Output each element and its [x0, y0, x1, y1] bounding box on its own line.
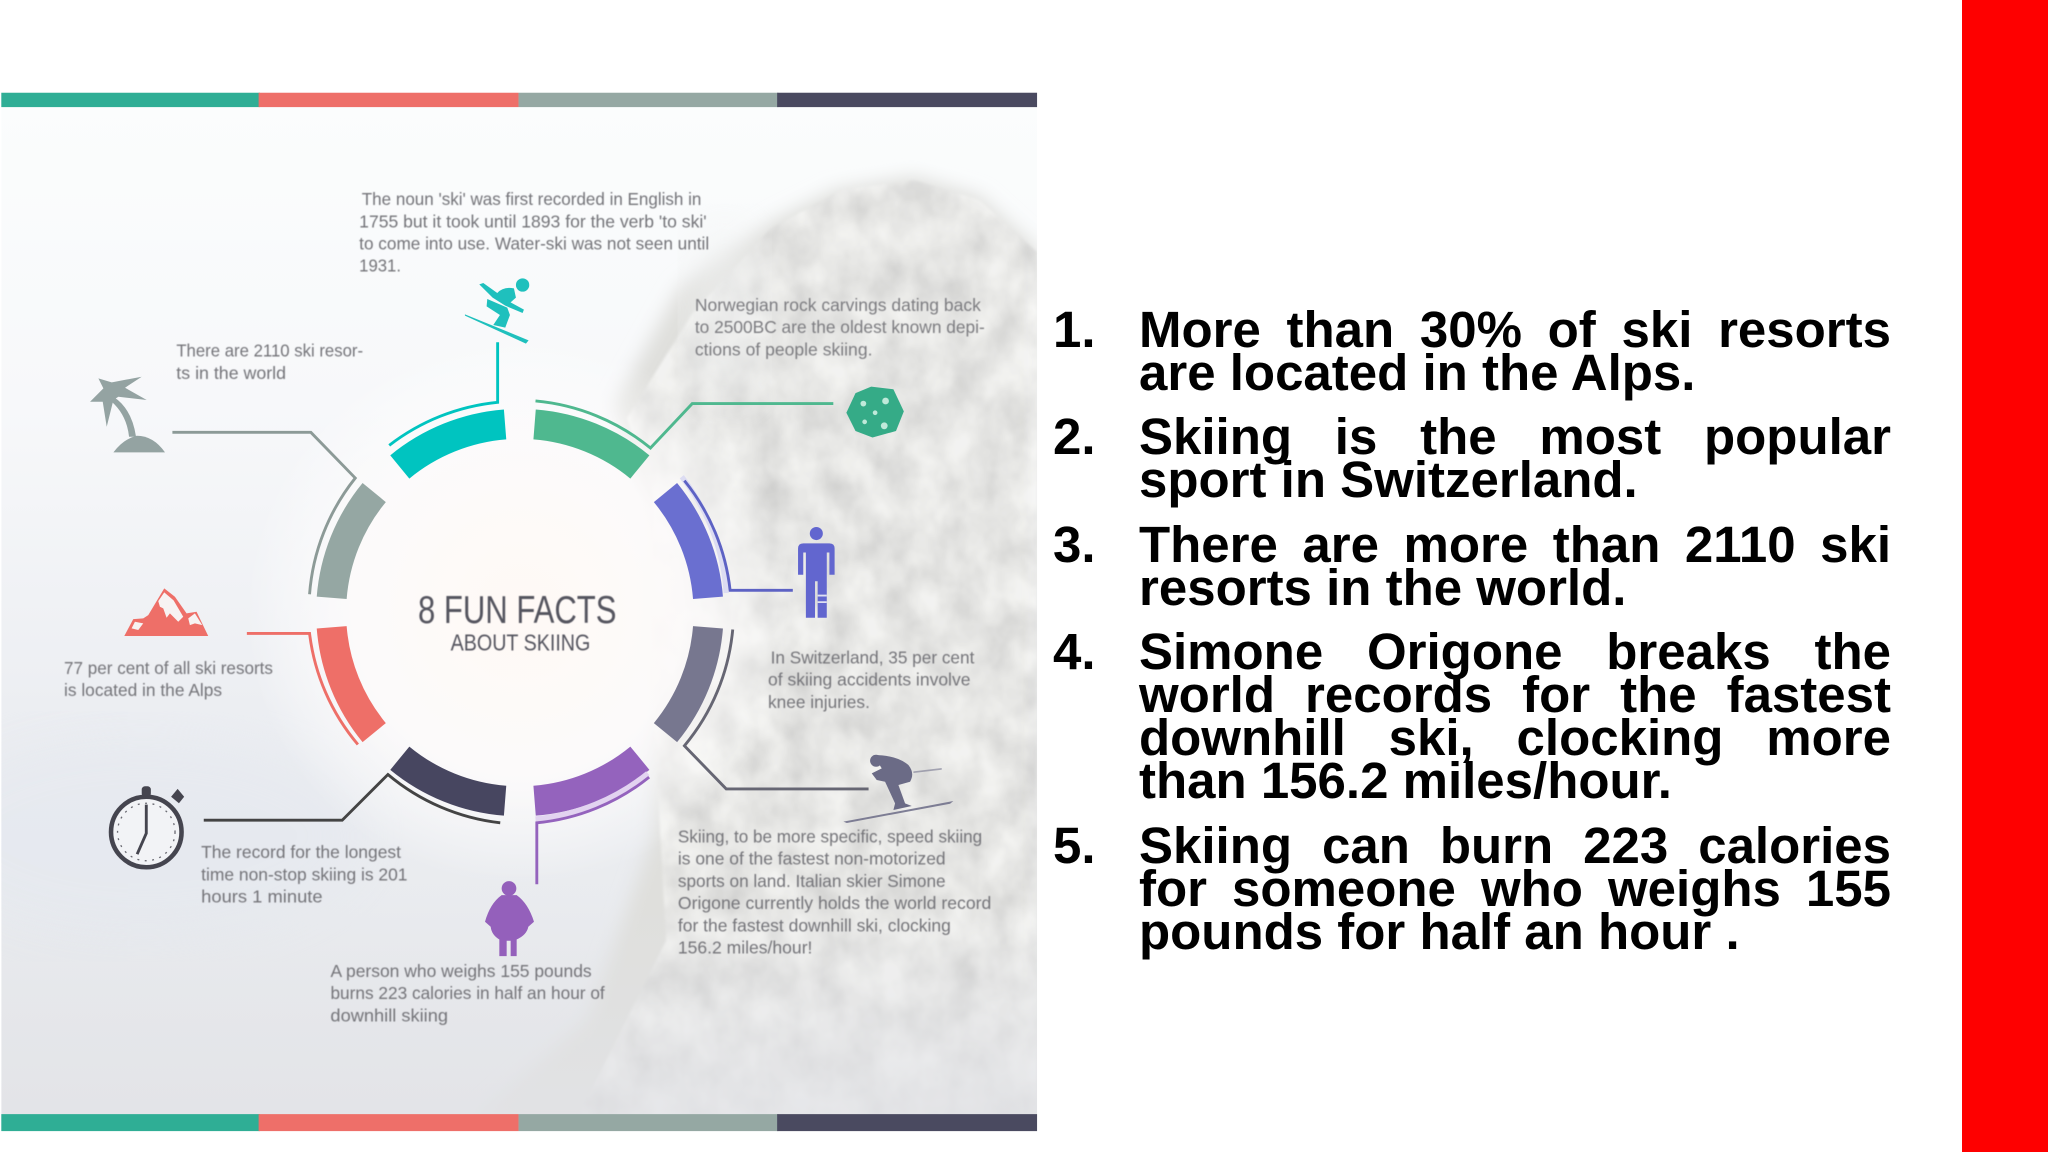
fact 2: sport in Switzerland.	[1139, 451, 1638, 508]
text: knee injuries: In Switzerland, 35 per cent	[771, 648, 974, 668]
text: knee injuries: of skiing accidents involve	[768, 670, 971, 690]
icon: palm tree	[90, 377, 165, 452]
icon: standing man	[798, 527, 835, 618]
fact 2: Skiing is the most popular	[1139, 408, 1891, 465]
fact 5	[1053, 817, 1891, 960]
heading: 8 fun facts: ABOUT SKIING	[451, 629, 590, 655]
fact 1: 1.	[1053, 301, 1096, 358]
fact 1: More than 30% of ski resorts	[1139, 301, 1891, 358]
icon: heavy person	[485, 881, 534, 956]
fact 4	[1053, 623, 1891, 809]
segment: dark longest ski	[204, 747, 506, 823]
text: calories burned	[330, 961, 605, 1025]
fact 5: for someone who weighs 155	[1139, 860, 1891, 917]
fact 4: downhill ski, clocking more	[1139, 709, 1891, 766]
fact 1: are located in the Alps.	[1139, 344, 1695, 401]
segment: slate speed skiing	[654, 626, 869, 789]
text: speed skiing: sports on land. Italian skier Simone	[678, 871, 946, 891]
segment: green rock carvings	[533, 401, 833, 479]
segment: purple calories	[533, 747, 649, 884]
segment: teal origin of word	[389, 342, 506, 479]
panel: ski infographic	[1, 92, 1038, 1132]
text: longest non-stop ski: hours 1 minute	[201, 887, 323, 907]
text: origin of the word ski	[359, 189, 709, 276]
text: alps share: is located in the Alps	[64, 680, 222, 700]
text: speed skiing	[678, 826, 991, 957]
fact 4: 4.	[1053, 623, 1096, 680]
fact 4: than 156.2 miles/hour.	[1139, 752, 1672, 809]
fact 5: pounds for half an hour .	[1139, 903, 1740, 960]
fact 2	[1053, 408, 1891, 508]
text: origin of the word ski: The noun 'ski' was first recorded in English in	[362, 189, 701, 209]
text: rock carvings	[695, 295, 985, 359]
text: speed skiing: is one of the fastest non-motorized	[678, 849, 946, 869]
text: number of resorts	[176, 341, 363, 383]
fact 1	[1053, 301, 1891, 401]
fact 5: Skiing can burn 223 calories	[1139, 817, 1891, 874]
text: rock carvings: to 2500BC are the oldest known depi-	[695, 317, 985, 337]
background: misty mountain photo	[0, 102, 1037, 1123]
text: alps share: 77 per cent of all ski resorts	[64, 658, 273, 678]
text: origin of the word ski: to come into use. Water-ski was not seen until	[359, 233, 709, 253]
heading: 8 fun facts: 8 FUN FACTS	[418, 589, 616, 632]
fact 4: world records for the fastest	[1139, 666, 1891, 723]
segment: blue knee injuries	[654, 477, 793, 599]
fact 3: resorts in the world.	[1139, 559, 1626, 616]
icon: rock	[846, 387, 904, 438]
icon: stopwatch	[111, 786, 184, 867]
segment: grey resorts	[172, 432, 386, 599]
text: longest non-stop ski: time non-stop skiing is 201	[201, 864, 408, 884]
icon: mountain	[124, 588, 208, 636]
text: rock carvings: ctions of people skiing.	[695, 339, 872, 359]
fact 3	[1053, 516, 1891, 616]
numbered list of skiing facts	[1053, 301, 1891, 960]
bottom colour bar	[1, 1114, 1037, 1131]
fact 3: 3.	[1053, 516, 1096, 573]
text: calories burned: burns 223 calories in half an hour of	[330, 983, 605, 1003]
text: longest non-stop ski: The record for the longest	[201, 842, 401, 862]
fact 2: 2.	[1053, 408, 1096, 465]
text: calories burned: A person who weighs 155 pounds	[330, 961, 592, 981]
text: longest non-stop ski	[201, 842, 408, 907]
icon: downhill skier	[465, 278, 529, 344]
text: speed skiing: Skiing, to be more specific, speed skiing	[678, 826, 982, 846]
fact 5: 5.	[1053, 817, 1096, 874]
text: calories burned: downhill skiing	[330, 1005, 448, 1025]
text: origin of the word ski: 1755 but it took until 1893 for the verb 'to ski'	[359, 211, 707, 231]
red side bar	[1962, 0, 2048, 1152]
text: alps share	[64, 658, 273, 700]
heading: 8 fun facts	[418, 589, 616, 655]
top colour bar	[1, 93, 1037, 107]
text: number of resorts: ts in the world	[176, 363, 286, 383]
text: origin of the word ski: 1931.	[359, 256, 401, 276]
text: number of resorts: There are 2110 ski resor-	[176, 341, 363, 361]
text: speed skiing: 156.2 miles/hour!	[678, 937, 812, 957]
text: speed skiing: Origone currently holds the world record	[678, 893, 991, 913]
segment: coral alps	[247, 626, 386, 744]
icon: crouching skier	[843, 755, 953, 823]
text: knee injuries	[768, 648, 974, 712]
ring: eight arc segments with leader lines	[172, 342, 869, 884]
fact 4: Simone Origone breaks the	[1139, 623, 1891, 680]
text: rock carvings: Norwegian rock carvings dating back	[695, 295, 981, 315]
fact 3: There are more than 2110 ski	[1139, 516, 1891, 573]
text: knee injuries: knee injuries.	[768, 692, 870, 712]
text: speed skiing: for the fastest downhill ski, clocking	[678, 915, 951, 935]
